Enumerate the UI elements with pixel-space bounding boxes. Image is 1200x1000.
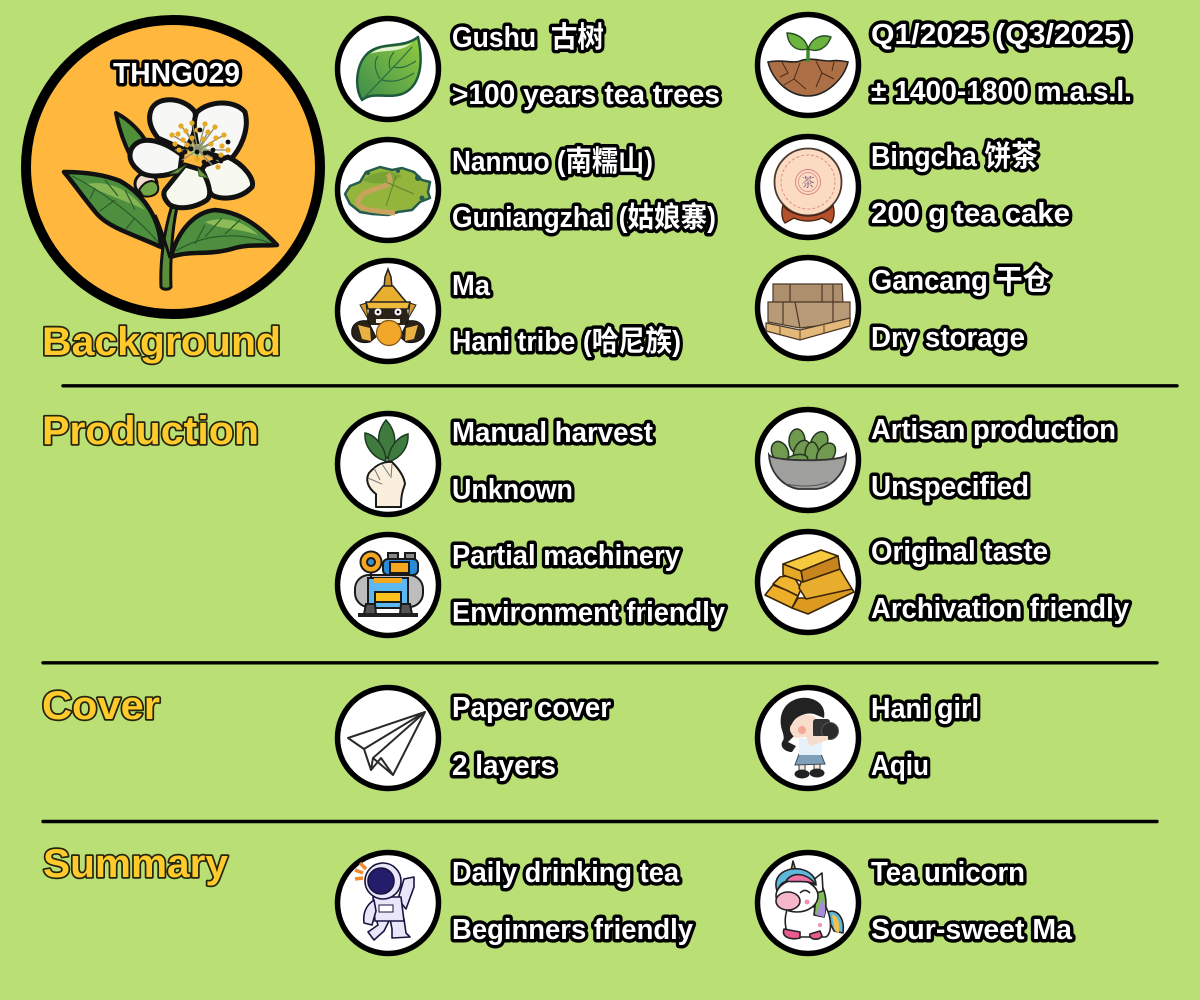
label: storage: Dry storage [871,322,1025,354]
item: Ma [338,260,681,362]
item: Gushu [338,18,720,120]
label: Bingcha: Bingcha 饼茶 [871,140,1038,173]
item: harvest date [758,14,1132,116]
divider [43,661,1157,664]
label: Aqiu: Aqiu [871,750,929,782]
divider [43,820,1157,823]
icon: girl with camera [758,688,858,788]
divider [63,384,1177,387]
label: date: Q1/2025 (Q3/2025) [871,19,1131,51]
icon: tea cake on stand [758,136,858,238]
label: sour-sweet: Sour-sweet Ma [871,914,1073,946]
item: Nannuo [338,140,716,240]
label: Hani girl: Hani girl [871,693,979,725]
heading: Production: Production [42,409,259,453]
heading: Cover: Cover [42,684,160,728]
label: archivation: Archivation friendly [871,593,1129,625]
item: original taste [758,532,1129,632]
item: paper cover [338,688,611,788]
label: environment: Environment friendly [452,597,725,629]
panel: background section [26,14,1132,364]
label: Ma: Ma [452,270,491,302]
item: artisan [758,410,1116,510]
item: daily tea [338,852,693,954]
icon: hand holding leaves [338,414,438,514]
label: Hani tribe: Hani tribe (哈尼族) [452,325,681,358]
tea flower badge [26,20,320,314]
icon: compressor machine [338,534,438,636]
item: harvest [338,414,653,514]
icon: bowl of leaves [758,410,858,510]
label: unspecified: Unspecified [871,471,1029,503]
icon: boxes on pallet [758,258,858,358]
label: Nannuo: Nannuo (南糯山) [452,145,653,178]
item: machinery [338,534,725,636]
label: Gancang: Gancang 干仓 [871,264,1050,297]
icon: leaf [338,18,438,120]
label: layers: 2 layers [452,750,556,782]
icon: tea cake on stand: 茶 [801,172,815,191]
icon: astronaut [338,852,438,954]
icon: golden guardian [338,260,438,362]
heading: Summary: Summary [43,842,229,886]
icon: tea flower [64,100,277,289]
label: beginners: Beginners friendly [452,914,693,946]
panel: summary section [43,842,1073,954]
label: machinery: Partial machinery [452,540,680,572]
label: paper cover: Paper cover [452,692,611,724]
panel: cover section [42,684,979,788]
icon: sprout in soil [758,14,858,116]
item: Hani girl [758,688,979,788]
label: age: >100 years tea trees [452,79,720,111]
badge code: THNG029 [113,58,240,90]
heading: Background: Background [42,320,281,364]
icon: mountain map [338,140,438,240]
label: weight: 200 g tea cake [871,198,1070,230]
label: Gushu: Gushu 古树 [452,21,604,54]
item: Bingcha [758,136,1070,238]
label: unicorn: Tea unicorn [871,857,1025,889]
label: harvest: Manual harvest [452,417,653,449]
item: tea unicorn [758,852,1073,954]
item: Gancang [758,258,1050,358]
icon: unicorn [758,852,858,954]
label: daily: Daily drinking tea [452,857,680,889]
label: unknown: Unknown [452,474,573,506]
label: Guniangzhai: Guniangzhai (姑娘寨) [452,201,716,234]
icon: gold bars [758,532,858,632]
label: taste: Original taste [871,536,1048,568]
label: artisan: Artisan production [871,414,1116,446]
panel: production section [42,409,1129,636]
label: altitude: ± 1400-1800 m.a.s.l. [871,76,1132,108]
icon: paper plane [338,688,438,788]
